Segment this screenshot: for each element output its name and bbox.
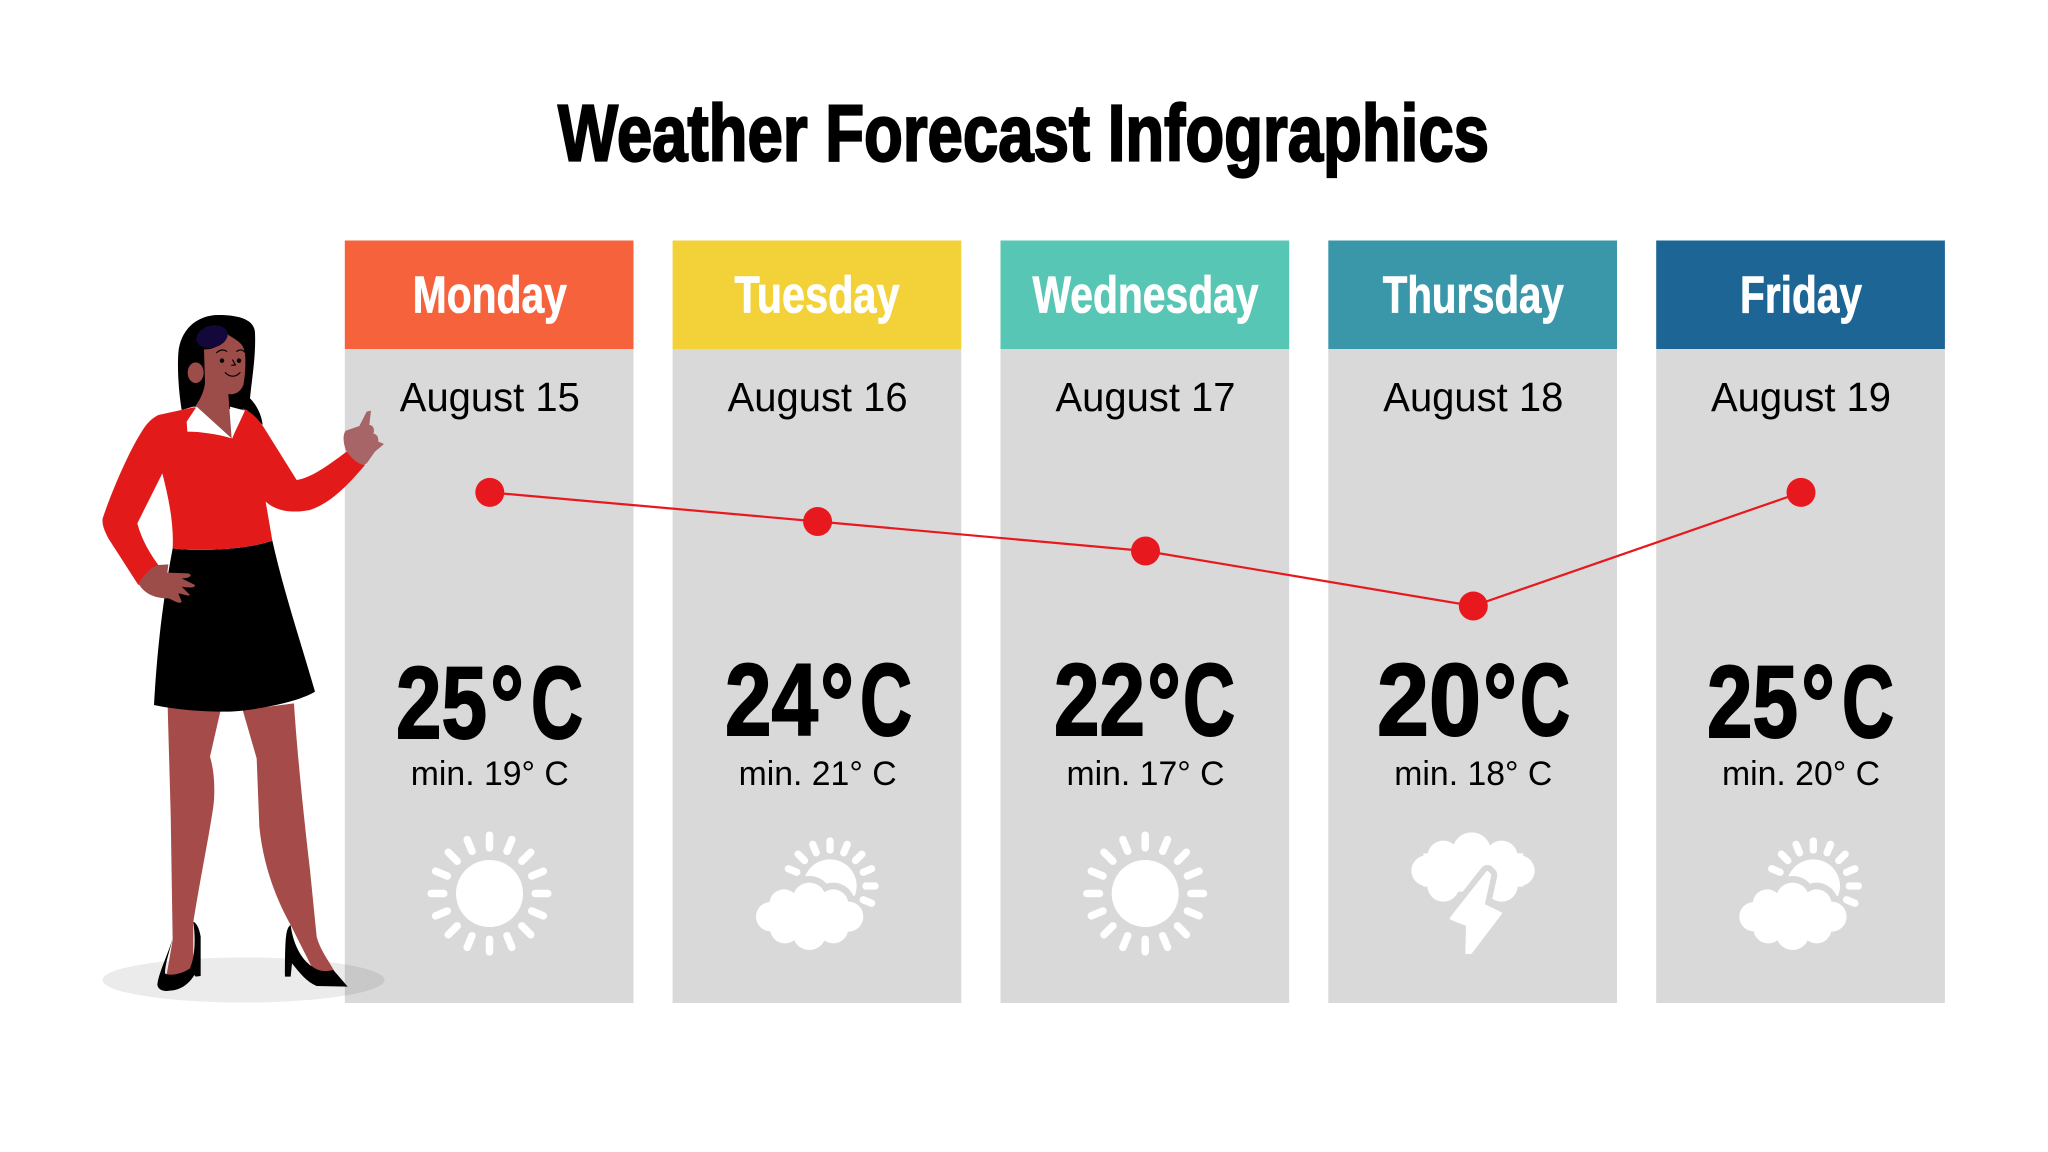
temperature: Friday: C — [1842, 645, 1894, 759]
header: Thursday: Thursday — [1383, 266, 1564, 324]
temperature: Tuesday: ° — [820, 642, 854, 765]
temperature: Tuesday: C — [860, 643, 912, 757]
skirt — [154, 541, 315, 712]
header: Monday: Monday — [413, 266, 567, 324]
temperature: Wednesday — [1054, 642, 1235, 765]
temperature: Monday: 25 — [396, 646, 487, 760]
temperature: Wednesday: C — [1183, 643, 1235, 757]
icon: sun behind cloud — [756, 841, 875, 950]
floor shadow — [102, 958, 384, 1002]
illustration: woman presenter — [102, 315, 384, 1002]
face details — [217, 350, 245, 376]
header: Monday — [345, 240, 634, 349]
collar — [187, 407, 245, 438]
temperature: Monday: ° — [490, 644, 524, 767]
temperature: Thursday: C — [1520, 643, 1570, 757]
temperature: Tuesday: 24 — [725, 643, 818, 757]
panel: Wednesday — [1000, 240, 1289, 1003]
temperature: Friday — [1707, 643, 1894, 766]
temperature: Tuesday — [725, 642, 912, 765]
temperature: Thursday: 20 — [1377, 643, 1481, 757]
sweater — [102, 407, 365, 585]
date: Friday: August 19 — [1711, 374, 1891, 420]
minimum temperature: Monday: min. 19° C — [411, 755, 569, 793]
legs and shoes — [157, 703, 348, 991]
temperature: Wednesday: ° — [1147, 642, 1181, 765]
icon: sun — [1087, 835, 1204, 952]
ear — [188, 362, 204, 383]
temperature: Friday: 25 — [1707, 645, 1798, 759]
temperature: Thursday: ° — [1483, 642, 1517, 765]
header: Tuesday — [673, 240, 961, 349]
date: Monday: August 15 — [400, 374, 580, 420]
icon: storm cloud with lightning — [1411, 832, 1535, 953]
header: Friday — [1656, 240, 1945, 349]
neck and face — [195, 334, 245, 438]
temperature: Monday — [396, 644, 583, 767]
panel: Monday — [345, 240, 634, 1003]
icon: sun behind cloud — [1739, 841, 1858, 950]
panel: Tuesday — [673, 240, 961, 1003]
date: Wednesday: August 17 — [1056, 374, 1236, 420]
temperature: Friday: ° — [1801, 643, 1835, 766]
minimum temperature: Thursday: min. 18° C — [1394, 755, 1552, 793]
pointing hand — [344, 411, 384, 465]
icon: sun — [431, 835, 548, 952]
date: Tuesday: August 16 — [728, 374, 908, 420]
date: Thursday: August 18 — [1383, 374, 1563, 420]
header: Friday: Friday — [1740, 266, 1862, 324]
header: Wednesday — [1000, 240, 1289, 349]
temperature: Thursday — [1377, 642, 1570, 765]
header: Thursday — [1328, 240, 1617, 349]
hair — [178, 315, 263, 425]
minimum temperature: Friday: min. 20° C — [1722, 755, 1880, 793]
line chart: temperature trend — [475, 478, 1815, 620]
upper body — [102, 315, 384, 712]
title: Weather Forecast Infographics — [558, 88, 1489, 178]
hair highlight — [194, 322, 230, 351]
minimum temperature: Tuesday: min. 21° C — [739, 755, 897, 793]
hand on hip — [138, 564, 195, 603]
header: Wednesday: Wednesday — [1032, 266, 1259, 324]
temperature: Monday: C — [531, 646, 583, 760]
panel: Friday — [1656, 240, 1945, 1003]
temperature: Wednesday: 22 — [1054, 643, 1145, 757]
minimum temperature: Wednesday: min. 17° C — [1066, 755, 1224, 793]
panel: Thursday — [1328, 240, 1617, 1003]
header: Tuesday: Tuesday — [734, 266, 900, 324]
